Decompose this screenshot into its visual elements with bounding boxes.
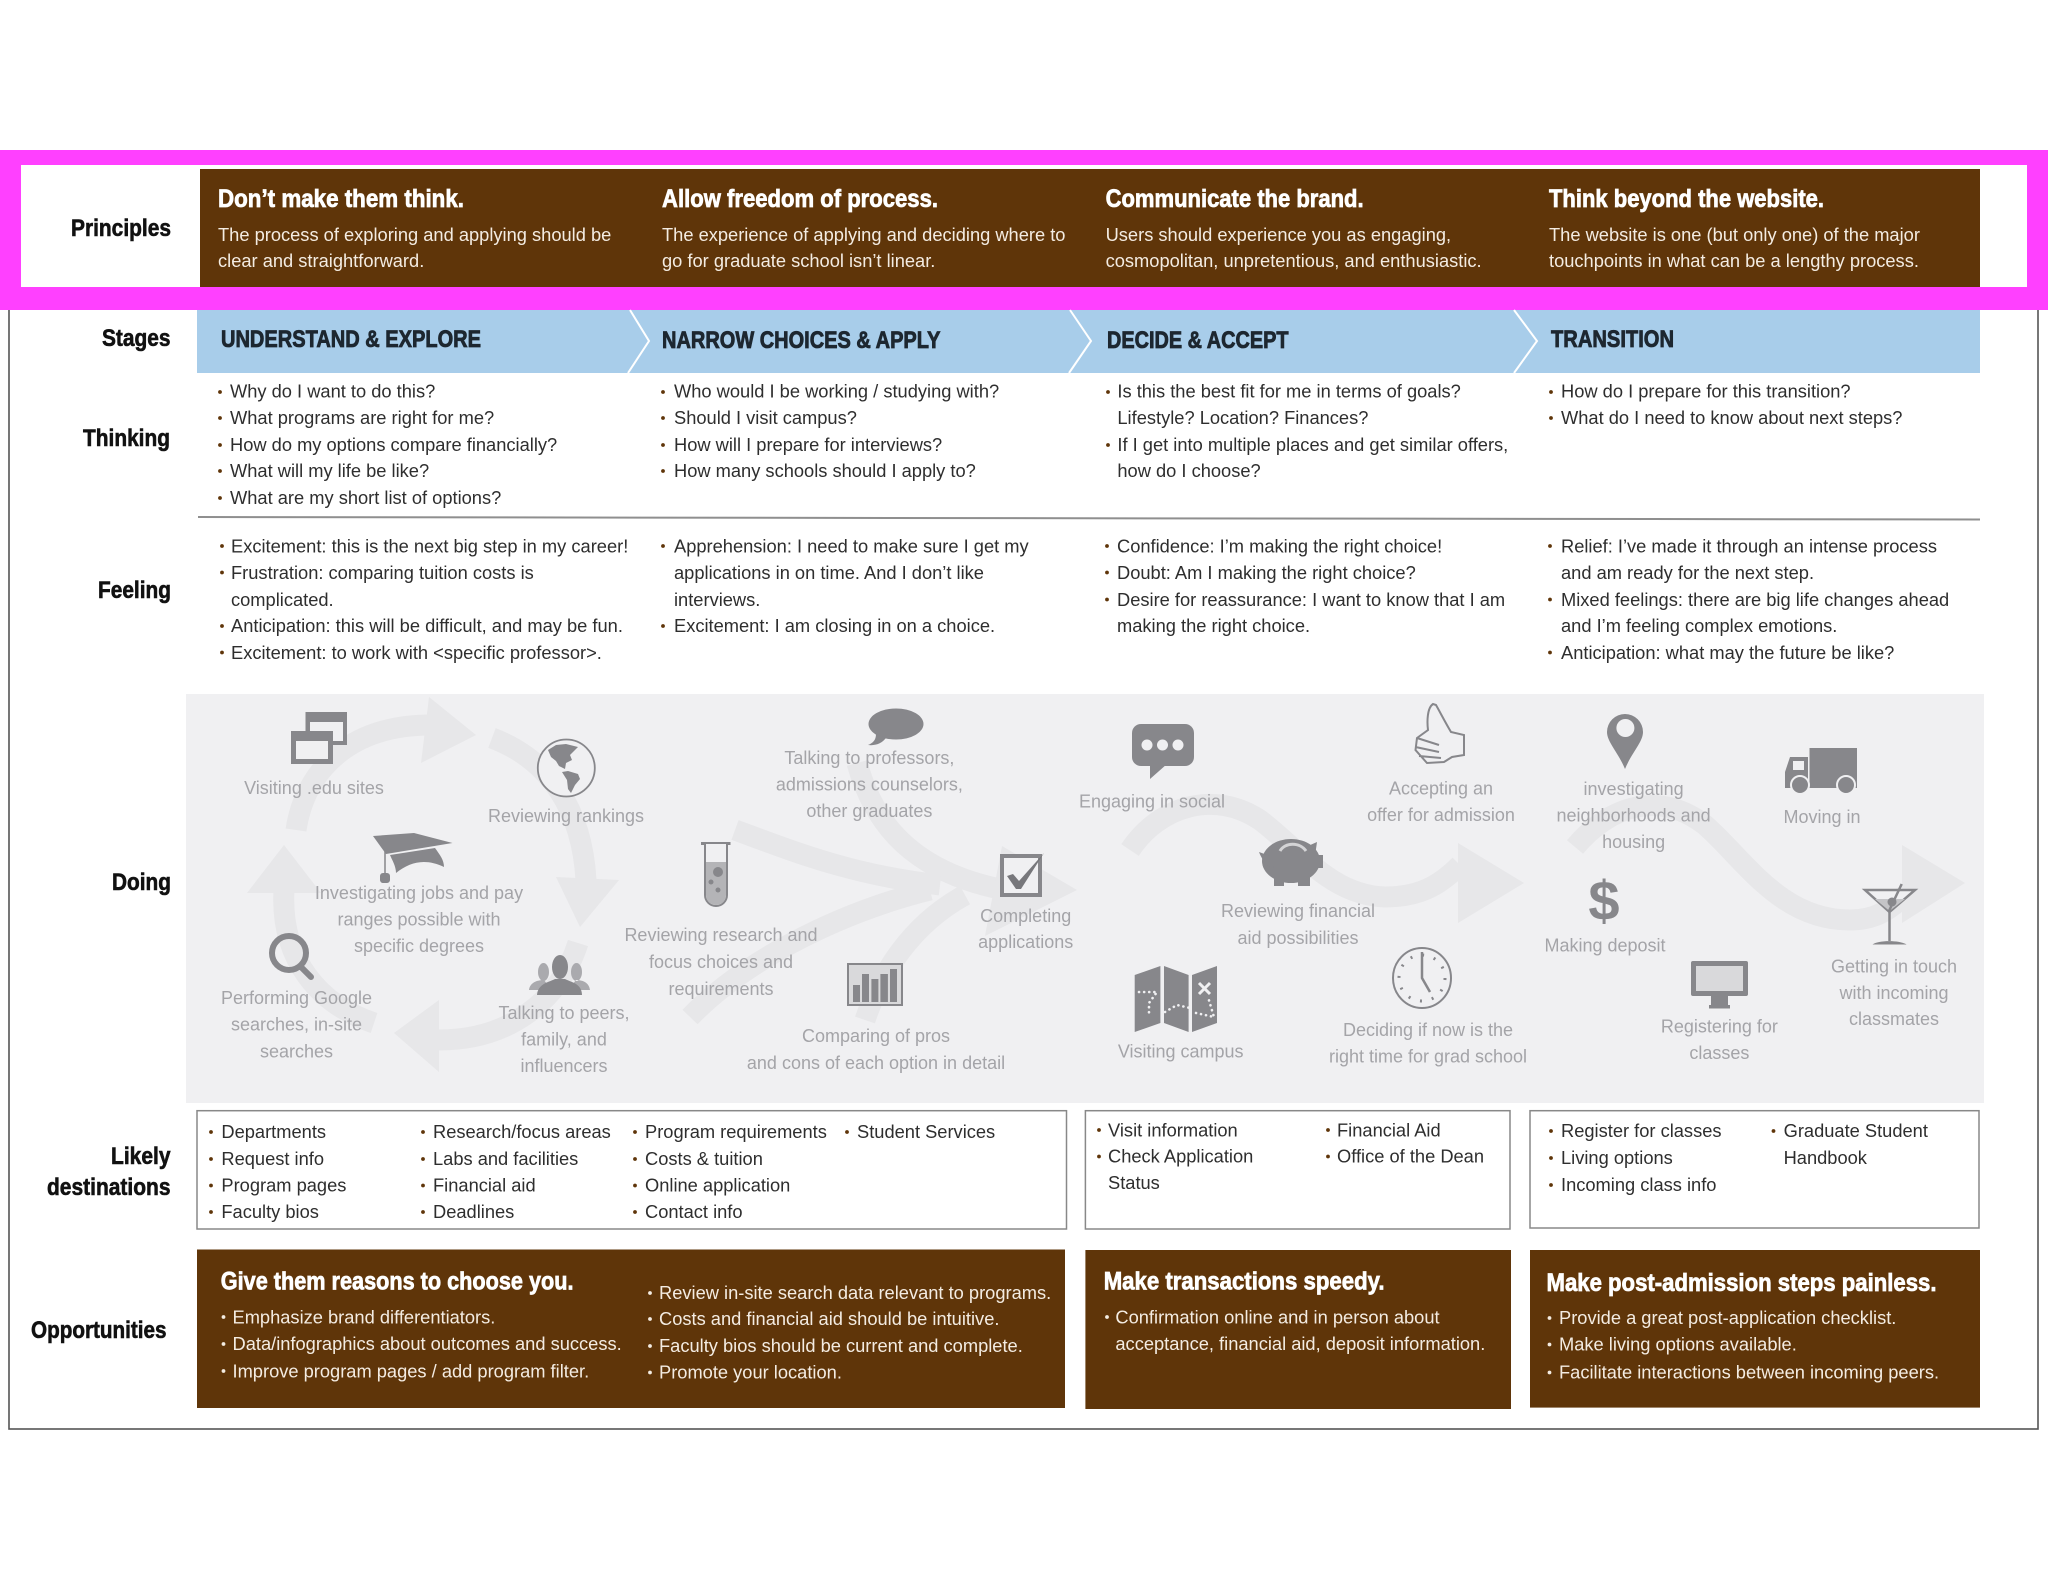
item: moving in bbox=[1783, 748, 1861, 827]
destinations box 2: Visit information bbox=[1108, 1119, 1238, 1140]
feeling column 4: Mixed feelings: there are big life changes ahead bbox=[1561, 589, 1949, 610]
icon: people bbox=[529, 955, 590, 995]
icon: checkbox bbox=[1002, 853, 1044, 895]
icon: bar chart bbox=[848, 964, 902, 1005]
feeling column 1 bbox=[220, 536, 628, 663]
principle 3: Communicate the brand. bbox=[1106, 185, 1364, 213]
thinking column 3: how do I choose? bbox=[1117, 460, 1261, 481]
item: talking to professors: other graduates bbox=[806, 801, 932, 821]
opportunity panel 3 bbox=[1530, 1250, 1980, 1408]
destinations box 3: Incoming class info bbox=[1561, 1174, 1716, 1195]
opportunity panel 2 bbox=[1085, 1250, 1511, 1409]
principle 4: touchpoints in what can be a lengthy process. bbox=[1549, 250, 1919, 271]
opportunity panel 1: Emphasize brand differentiators. bbox=[232, 1306, 495, 1328]
opportunity panel 3: Make living options available. bbox=[1559, 1334, 1797, 1355]
item: visiting edu sites bbox=[244, 712, 384, 798]
item: moving in: Moving in bbox=[1783, 807, 1861, 827]
opportunity panel 3: Facilitate interactions between incoming peers. bbox=[1559, 1362, 1939, 1383]
item: talking to peers: family, and bbox=[521, 1030, 607, 1050]
opportunity panel 1: Data/infographics about outcomes and success. bbox=[232, 1333, 622, 1354]
destinations box 2: Financial Aid bbox=[1337, 1119, 1441, 1140]
item: making deposit: Making deposit bbox=[1544, 936, 1666, 956]
destinations box 1: Student Services bbox=[857, 1121, 995, 1142]
principle 1 bbox=[218, 185, 611, 271]
feeling column 1: complicated. bbox=[231, 589, 334, 610]
item: reviewing financial aid: Reviewing financial bbox=[1221, 901, 1375, 921]
item: engaging in social bbox=[1079, 724, 1225, 812]
principle 1: The process of exploring and applying should be bbox=[218, 224, 611, 245]
item: making deposit bbox=[1544, 869, 1666, 956]
thinking column 1: How do my options compare financially? bbox=[230, 434, 557, 455]
stage 1: UNDERSTAND & EXPLORE bbox=[221, 326, 481, 353]
feeling column 3: Desire for reassurance: I want to know that I am bbox=[1117, 589, 1505, 610]
thinking column 3: If I get into multiple places and get similar offers, bbox=[1117, 434, 1508, 455]
item: engaging in social: Engaging in social bbox=[1079, 792, 1225, 812]
principle 2 bbox=[662, 185, 1065, 271]
destinations box 3: Living options bbox=[1561, 1147, 1673, 1168]
icon: windows bbox=[291, 712, 347, 764]
label: Doing: Doing bbox=[112, 869, 171, 896]
icon: speech bubble bbox=[868, 708, 924, 745]
panel: doing bbox=[186, 694, 1984, 1103]
destinations box 3: Register for classes bbox=[1561, 1120, 1722, 1141]
thinking column 2: How many schools should I apply to? bbox=[674, 460, 976, 481]
item: investigating neighborhoods: neighborhoods and bbox=[1557, 806, 1711, 826]
icon: piggy bank bbox=[1259, 839, 1323, 886]
item: getting in touch: with incoming bbox=[1838, 983, 1949, 1003]
stage 4: TRANSITION bbox=[1551, 326, 1674, 353]
destinations box 3 bbox=[1530, 1111, 1979, 1228]
item: reviewing financial aid: aid possibilities bbox=[1237, 928, 1359, 948]
label: Principles: Principles bbox=[71, 215, 171, 242]
item: reviewing research: focus choices and bbox=[649, 952, 793, 972]
icon: truck bbox=[1785, 748, 1857, 794]
principle 3 bbox=[1106, 185, 1482, 271]
opportunity panel 1: Improve program pages / add program filter. bbox=[232, 1360, 589, 1382]
item: deciding timing bbox=[1329, 948, 1527, 1067]
destinations box 2: Check Application bbox=[1108, 1146, 1253, 1167]
highlight band: principles bbox=[0, 150, 2048, 310]
thinking column 4 bbox=[1549, 381, 1902, 428]
thinking column 1: What are my short list of options? bbox=[230, 487, 501, 508]
feeling column 2: interviews. bbox=[674, 589, 760, 610]
destinations box 1: Faculty bios bbox=[221, 1201, 319, 1222]
icon: test tube bbox=[701, 842, 730, 906]
item: investigating jobs bbox=[315, 833, 523, 956]
destinations box 2 bbox=[1085, 1111, 1510, 1229]
destinations box 1: Financial aid bbox=[433, 1175, 536, 1196]
item: completing applications: Completing bbox=[980, 906, 1071, 926]
icon: monitor bbox=[1691, 961, 1748, 1008]
opportunity panel 3: Provide a great post-application checklist. bbox=[1559, 1307, 1896, 1328]
destinations box 1: Research/focus areas bbox=[433, 1121, 611, 1142]
destinations box 1: Request info bbox=[221, 1148, 324, 1169]
item: getting in touch: classmates bbox=[1849, 1009, 1939, 1029]
label: Stages: Stages bbox=[102, 325, 170, 352]
feeling column 2 bbox=[661, 536, 1030, 636]
opportunity panel 1: Promote your location. bbox=[659, 1362, 842, 1383]
item: getting in touch bbox=[1831, 884, 1957, 1029]
feeling column 3: making the right choice. bbox=[1117, 615, 1310, 636]
opportunity panel 3: Make post-admission steps painless. bbox=[1546, 1269, 1936, 1297]
item: registering bbox=[1661, 961, 1778, 1063]
thinking column 2 bbox=[661, 381, 999, 481]
thinking column 4: How do I prepare for this transition? bbox=[1561, 381, 1851, 402]
destinations box 1: Costs & tuition bbox=[645, 1148, 763, 1169]
item: investigating neighborhoods: investigating bbox=[1584, 779, 1684, 799]
stages banner bbox=[197, 310, 1980, 373]
item: registering: Registering for bbox=[1661, 1017, 1778, 1037]
icon: globe bbox=[538, 740, 595, 796]
thinking column 1: Why do I want to do this? bbox=[230, 381, 435, 402]
opportunity panel 2: acceptance, financial aid, deposit information. bbox=[1115, 1333, 1485, 1354]
thinking column 2: Who would I be working / studying with? bbox=[674, 381, 999, 402]
principle 4 bbox=[1549, 185, 1920, 271]
item: deciding timing: right time for grad school bbox=[1329, 1047, 1527, 1067]
icon: martini bbox=[1865, 884, 1915, 944]
label: Feeling: Feeling bbox=[98, 577, 171, 604]
item: visiting edu sites: Visiting .edu sites bbox=[244, 778, 384, 798]
icon: graduation cap bbox=[373, 833, 452, 883]
thinking column 3: Is this the best fit for me in terms of goals? bbox=[1117, 381, 1461, 402]
feeling column 1: Excitement: to work with <specific professor>. bbox=[231, 642, 602, 663]
item: talking to professors: Talking to professors, bbox=[784, 748, 954, 768]
item: reviewing rankings bbox=[488, 740, 644, 826]
item: reviewing research bbox=[624, 842, 818, 999]
item: visiting campus: Visiting campus bbox=[1118, 1042, 1244, 1062]
thinking column 1: What programs are right for me? bbox=[230, 407, 494, 428]
item: reviewing research: Reviewing research and bbox=[624, 925, 818, 945]
opportunity panel 1: Review in-site search data relevant to programs. bbox=[659, 1282, 1051, 1303]
item: deciding timing: Deciding if now is the bbox=[1343, 1020, 1513, 1040]
thinking column 4: What do I need to know about next steps? bbox=[1561, 407, 1902, 428]
item: talking to professors: admissions counselors, bbox=[776, 775, 963, 795]
feeling column 4: Relief: I’ve made it through an intense process bbox=[1561, 536, 1937, 556]
opportunity panel 1 bbox=[197, 1250, 1065, 1408]
feeling column 1: Frustration: comparing tuition costs is bbox=[231, 562, 534, 583]
label: Likely destinations bbox=[47, 1143, 171, 1201]
opportunity panel 1: Faculty bios should be current and complete. bbox=[659, 1335, 1023, 1356]
principle 2: Allow freedom of process. bbox=[662, 185, 938, 213]
item: accepting offer: offer for admission bbox=[1367, 805, 1515, 825]
feeling column 1: Anticipation: this will be difficult, and may be fun. bbox=[231, 615, 623, 636]
icon: map bbox=[1135, 966, 1217, 1032]
item: google searches bbox=[221, 936, 372, 1062]
item: talking to peers: Talking to peers, bbox=[498, 1003, 630, 1023]
destinations box 3: Graduate Student bbox=[1784, 1120, 1928, 1141]
destinations box 1: Departments bbox=[221, 1121, 326, 1142]
opportunity panel 2: Make transactions speedy. bbox=[1104, 1267, 1384, 1295]
item: reviewing research: requirements bbox=[668, 979, 774, 999]
principle 3: Users should experience you as engaging, bbox=[1106, 224, 1451, 245]
destinations box 1: Labs and facilities bbox=[433, 1148, 578, 1169]
feeling column 4: and am ready for the next step. bbox=[1561, 562, 1814, 583]
principle 1: clear and straightforward. bbox=[218, 250, 424, 271]
icon: chat bbox=[1132, 724, 1194, 779]
destinations box 1: Online application bbox=[645, 1175, 790, 1196]
item: investigating jobs: Investigating jobs and pay bbox=[315, 883, 523, 903]
destinations box 1: Program pages bbox=[221, 1175, 346, 1196]
feeling column 2: Excitement: I am closing in on a choice. bbox=[674, 615, 995, 636]
feeling column 2: applications in on time. And I don’t like bbox=[674, 562, 984, 583]
outer frame bbox=[9, 300, 2038, 1429]
item: google searches: Performing Google bbox=[221, 988, 372, 1008]
icon: thumbs up bbox=[1416, 704, 1464, 763]
icon: map pin bbox=[1607, 714, 1643, 769]
feeling column 4: and I’m feeling complex emotions. bbox=[1561, 615, 1837, 636]
icon: clock bbox=[1393, 948, 1451, 1008]
destinations box 1: Deadlines bbox=[433, 1201, 514, 1222]
destinations box 2: Status bbox=[1108, 1172, 1160, 1193]
label: Thinking: Thinking bbox=[83, 425, 170, 452]
thinking column 2: How will I prepare for interviews? bbox=[674, 434, 942, 455]
item: visiting campus bbox=[1118, 966, 1244, 1062]
feeling column 4 bbox=[1548, 536, 1949, 663]
principle 2: The experience of applying and deciding where to bbox=[662, 224, 1065, 245]
feeling column 3: Doubt: Am I making the right choice? bbox=[1117, 562, 1416, 583]
item: investigating jobs: specific degrees bbox=[354, 936, 484, 956]
item: google searches: searches bbox=[260, 1042, 333, 1062]
destinations box 1: Program requirements bbox=[645, 1121, 827, 1142]
panel: principles bbox=[200, 169, 1980, 287]
destinations box 1: Contact info bbox=[645, 1201, 743, 1222]
opportunity panel 1: Costs and financial aid should be intuitive. bbox=[659, 1308, 999, 1329]
background arrow: wave two bbox=[1575, 805, 1965, 923]
thinking column 1 bbox=[218, 381, 557, 508]
item: comparing pros and cons bbox=[747, 964, 1005, 1073]
background arrows: cycle bbox=[247, 697, 619, 1072]
label: Likely destinations: destinations bbox=[47, 1174, 170, 1201]
background arrows: converging bbox=[690, 763, 1077, 1020]
item: reviewing rankings: Reviewing rankings bbox=[488, 806, 644, 826]
label: Opportunities: Opportunities bbox=[31, 1317, 166, 1344]
stage 3: DECIDE & ACCEPT bbox=[1107, 327, 1289, 354]
feeling column 2: Apprehension: I need to make sure I get my bbox=[674, 536, 1030, 556]
thinking column 2: Should I visit campus? bbox=[674, 407, 857, 428]
item: comparing pros and cons: Comparing of pros bbox=[802, 1026, 950, 1046]
principle 3: cosmopolitan, unpretentious, and enthusiastic. bbox=[1106, 250, 1482, 271]
item: investigating jobs: ranges possible with bbox=[337, 910, 501, 930]
destinations box 2: Office of the Dean bbox=[1337, 1146, 1484, 1167]
item: comparing pros and cons: and cons of each option in detail bbox=[747, 1053, 1005, 1073]
principle 2: go for graduate school isn’t linear. bbox=[662, 250, 935, 271]
item: talking to peers: influencers bbox=[520, 1056, 608, 1076]
item: google searches: searches, in-site bbox=[231, 1015, 362, 1035]
icon: magnifier bbox=[272, 936, 311, 977]
stage 2: NARROW CHOICES & APPLY bbox=[662, 327, 940, 354]
feeling column 3: Confidence: I’m making the right choice! bbox=[1117, 536, 1442, 556]
destinations box 3: Handbook bbox=[1784, 1147, 1868, 1168]
icon: dollar: $ bbox=[1588, 869, 1620, 932]
item: getting in touch: Getting in touch bbox=[1831, 956, 1957, 976]
opportunity panel 1: Give them reasons to choose you. bbox=[221, 1267, 574, 1295]
opportunity panel 2: Confirmation online and in person about bbox=[1115, 1306, 1440, 1328]
principle 4: The website is one (but only one) of the major bbox=[1549, 224, 1920, 245]
principle 4: Think beyond the website. bbox=[1549, 185, 1824, 213]
item: accepting offer bbox=[1367, 704, 1515, 825]
feeling column 3 bbox=[1105, 536, 1505, 636]
item: investigating neighborhoods bbox=[1557, 714, 1711, 852]
thinking column 1: What will my life be like? bbox=[230, 460, 429, 481]
item: reviewing financial aid bbox=[1221, 839, 1375, 948]
item: completing applications bbox=[978, 853, 1073, 952]
item: talking to peers bbox=[498, 955, 630, 1076]
item: completing applications: applications bbox=[978, 932, 1073, 952]
feeling column 1: Excitement: this is the next big step in my career! bbox=[231, 536, 628, 556]
destinations box 1 bbox=[197, 1111, 1066, 1229]
thinking column 3 bbox=[1106, 381, 1508, 481]
item: registering: classes bbox=[1689, 1043, 1749, 1063]
feeling column 4: Anticipation: what may the future be like? bbox=[1561, 642, 1894, 663]
thinking column 3: Lifestyle? Location? Finances? bbox=[1117, 407, 1368, 428]
item: accepting offer: Accepting an bbox=[1389, 779, 1493, 799]
principle 1: Don’t make them think. bbox=[218, 185, 464, 213]
item: investigating neighborhoods: housing bbox=[1602, 832, 1665, 852]
background arrow: wave one bbox=[1130, 804, 1524, 923]
label: Likely destinations: Likely bbox=[111, 1143, 171, 1170]
item: talking to professors bbox=[776, 708, 963, 821]
